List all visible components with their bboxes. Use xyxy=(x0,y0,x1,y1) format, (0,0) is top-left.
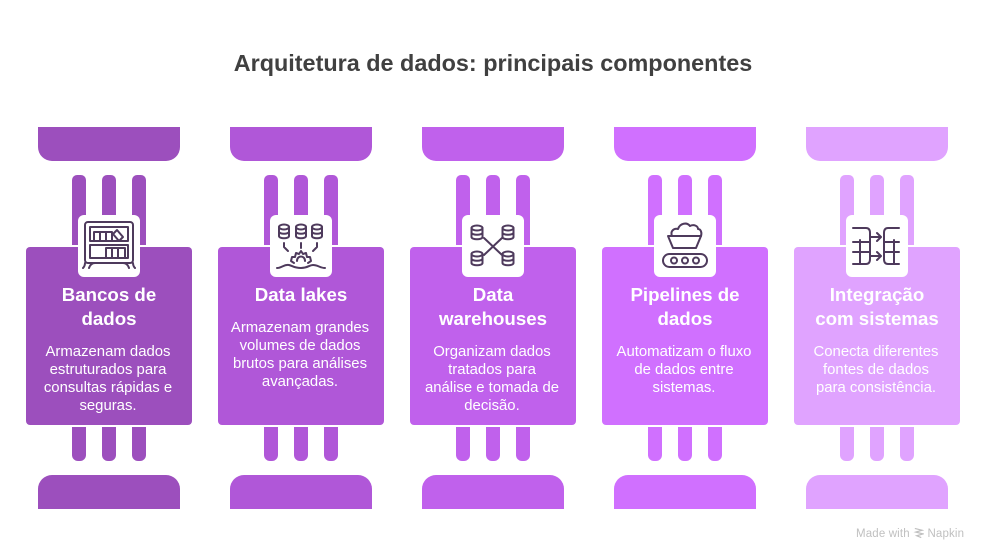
panel: Bancos de dados: Armazenam dados xyxy=(46,344,170,360)
panel: Data warehouses: Organizam dados xyxy=(433,344,551,360)
panel: Integração com sistemas xyxy=(794,127,960,509)
panel: Data warehouses xyxy=(410,127,576,509)
panel: Integração com sistemas: fontes de dados xyxy=(823,362,929,378)
panel: Data warehouses: decisão. xyxy=(464,398,520,414)
panel: Pipelines de dados: dados xyxy=(657,308,713,329)
panel: Data warehouses: Data xyxy=(473,284,513,305)
panel: Data lakes: volumes de dados xyxy=(240,338,360,354)
title: Arquitetura de dados: principais componentes xyxy=(234,50,752,76)
panel: Integração com sistemas: Conecta diferentes xyxy=(814,344,938,360)
panel: Bancos de dados xyxy=(26,127,192,509)
panel: Pipelines de dados: Automatizam o fluxo xyxy=(617,344,751,360)
panel: Bancos de dados: dados xyxy=(81,308,137,329)
panel: Pipelines de dados: sistemas. xyxy=(653,380,715,396)
panel: Data lakes: Data lakes xyxy=(255,284,347,305)
panel: Integração com sistemas: Integração xyxy=(830,284,924,305)
panel: Bancos de dados: estruturados para xyxy=(50,362,166,378)
panel: Data lakes: brutos para análises xyxy=(233,356,367,372)
panel: Bancos de dados: consultas rápidas e xyxy=(44,380,172,396)
panel: Data warehouses: tratados para xyxy=(448,362,536,378)
panel: Integração com sistemas: para consistência. xyxy=(816,380,936,396)
panel: Pipelines de dados: de dados entre xyxy=(634,362,734,378)
panel: Pipelines de dados: Pipelines de xyxy=(630,284,740,305)
icon: connected databases xyxy=(462,215,524,277)
watermark: Made with Napkin: Made with Napkin xyxy=(856,528,964,540)
panel: Pipelines de dados xyxy=(602,127,768,509)
icon: bookshelf xyxy=(78,215,140,277)
panel: Data lakes xyxy=(218,127,384,509)
panel: Data warehouses: análise e tomada de xyxy=(425,380,559,396)
panel: Bancos de dados: seguras. xyxy=(79,398,137,414)
icon: merging tables with arrows xyxy=(846,215,908,277)
panel: Data warehouses: warehouses xyxy=(439,308,547,329)
panel: Data lakes: Armazenam grandes xyxy=(231,320,369,336)
panel: Bancos de dados: Bancos de xyxy=(62,284,156,305)
icon: conveyor belt xyxy=(654,215,716,277)
panel: Integração com sistemas: com sistemas xyxy=(815,308,939,329)
panel: Data lakes: avançadas. xyxy=(262,374,338,390)
icon: databases flowing into a lake xyxy=(270,215,332,277)
